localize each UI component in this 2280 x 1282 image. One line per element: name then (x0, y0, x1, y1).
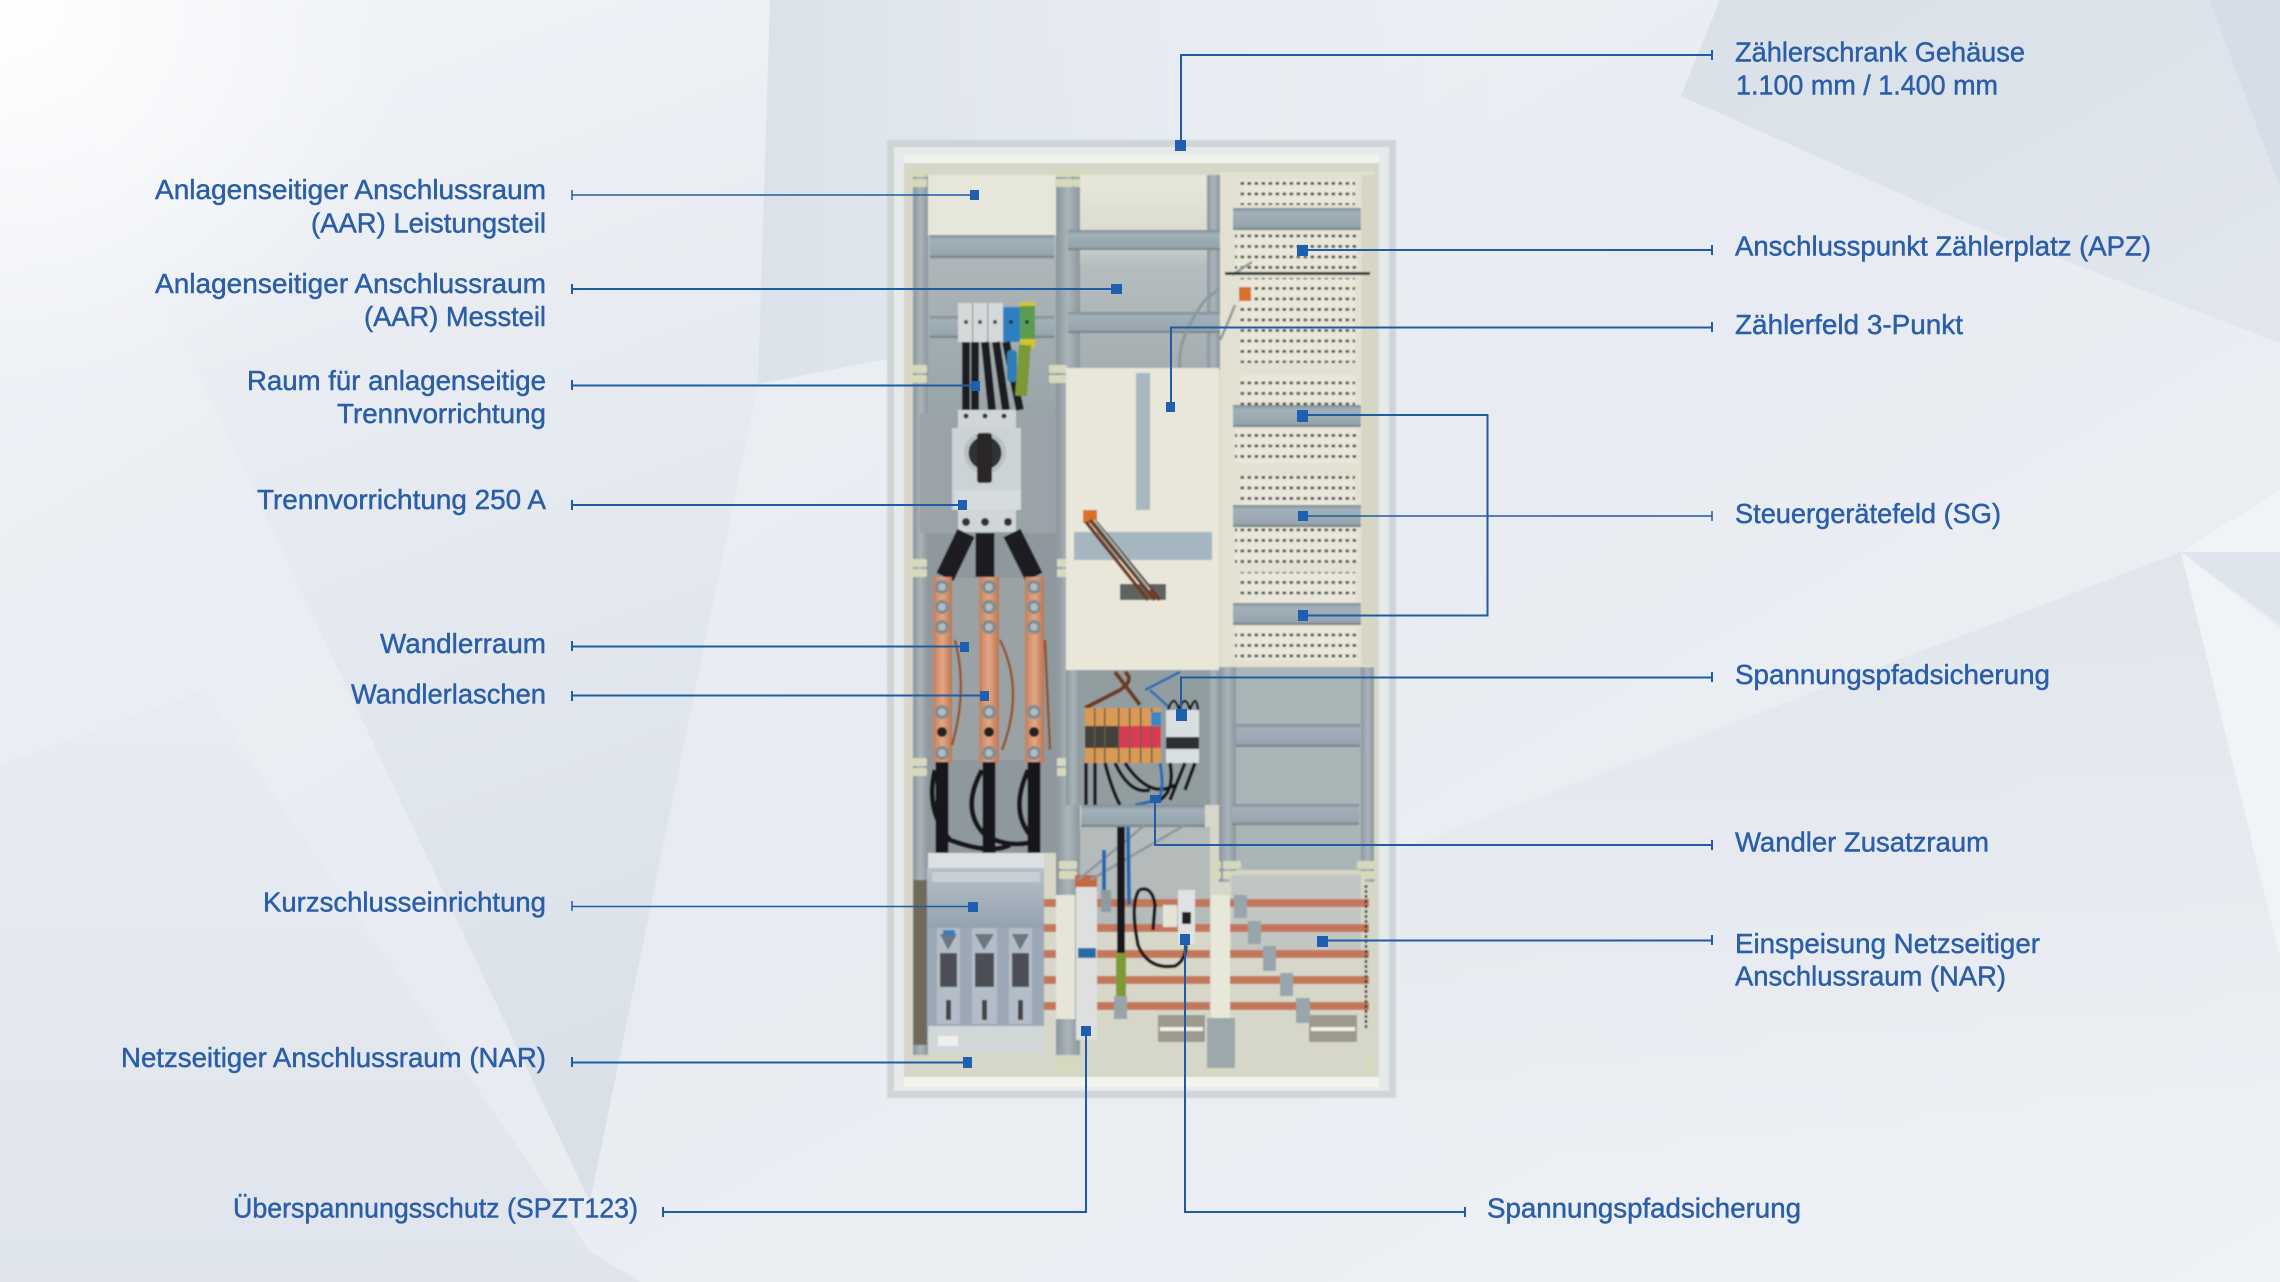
left column: AAR power section (909, 169, 1091, 1055)
callout: Trennvorrichtung 250 A: Trennvorrichtung 250 A (257, 484, 547, 515)
callout: Zählerfeld 3-Punkt (1166, 309, 1963, 412)
callout: Spannungspfadsicherung right: Spannungspfadsicherung (1735, 659, 2050, 690)
callout: Anlagenseitiger Anschlussraum (AAR) Messteil: (AAR) Messteil (364, 301, 546, 332)
callout: Wandlerlaschen (351, 678, 989, 710)
electrical meter cabinet (887, 140, 1396, 1098)
callout: Raum für anlagenseitige Trennvorrichtung: Raum für anlagenseitige (247, 365, 546, 396)
callout: Wandlerraum (380, 628, 969, 659)
callout: Überspannungsschutz (SPZT123): Überspannungsschutz (SPZT123) (233, 1192, 638, 1224)
distribution terminal blocks (958, 302, 1035, 410)
callout: Zählerschrank Gehäuse (1175, 36, 2025, 151)
callout: Raum für anlagenseitige Trennvorrichtung: Trennvorrichtung (337, 398, 546, 429)
right column: control device field perforated plates (1220, 172, 1374, 669)
callout: Anlagenseitiger Anschlussraum (AAR) Leistungsteil: Anlagenseitiger Anschlussraum (155, 174, 546, 205)
callout: Überspannungsschutz (SPZT123) (233, 1026, 1091, 1224)
callout: Kurzschlusseinrichtung (263, 886, 978, 918)
callout: Spannungspfadsicherung bottom (1180, 934, 1801, 1224)
callout: Einspeisung Netzseitiger Anschlussraum (NAR) (1317, 928, 2040, 992)
callout: Wandlerraum: Wandlerraum (380, 628, 546, 659)
callout: Wandler Zusatzraum (1150, 795, 1989, 858)
callout: Anlagenseitiger Anschlussraum (AAR) Messteil (155, 268, 1122, 332)
cabinet frame (887, 140, 1396, 1098)
callout: Einspeisung Netzseitiger Anschlussraum (NAR): Anschlussraum (NAR) (1735, 960, 2006, 992)
callout: Anlagenseitiger Anschlussraum (AAR) Messteil: Anlagenseitiger Anschlussraum (155, 268, 546, 299)
current transformer room with copper bars (927, 533, 1057, 853)
callout: Steuergerätefeld (SG) with bracket: Steuergerätefeld (SG) (1735, 498, 2001, 529)
callout: Zählerfeld 3-Punkt: Zählerfeld 3-Punkt (1735, 309, 1963, 340)
lower middle: grid connection with surge protection (1044, 825, 1369, 1072)
callout: Netzseitiger Anschlussraum (NAR) (121, 1042, 972, 1073)
callout: Wandlerlaschen: Wandlerlaschen (351, 678, 546, 710)
callout: Anlagenseitiger Anschlussraum (AAR) Leistungsteil: (AAR) Leistungsteil (311, 208, 546, 238)
callout: Kurzschlusseinrichtung: Kurzschlusseinrichtung (263, 886, 546, 918)
callout: Netzseitiger Anschlussraum (NAR): Netzseitiger Anschlussraum (NAR) (121, 1042, 546, 1073)
short-circuit device fuse block (913, 853, 1044, 1053)
callout: Steuergerätefeld (SG) with bracket (1297, 410, 2001, 621)
disconnect switch 250 A (920, 410, 1056, 533)
callout: Anschlusspunkt Zählerplatz (APZ): Anschlusspunkt Zählerplatz (APZ) (1735, 230, 2151, 262)
callout: Spannungspfadsicherung right (1176, 659, 2050, 721)
right column: empty compartment with rails (1057, 667, 1375, 1075)
callout: Wandler Zusatzraum: Wandler Zusatzraum (1735, 826, 1989, 858)
callout: Zählerschrank Gehäuse: 1.100 mm / 1.400 mm (1736, 70, 1998, 100)
callout: Anschlusspunkt Zählerplatz (APZ) (1297, 230, 2151, 262)
callout: Anlagenseitiger Anschlussraum (AAR) Leistungsteil (155, 174, 979, 238)
callout: Spannungspfadsicherung bottom: Spannungspfadsicherung (1487, 1192, 1801, 1224)
meter field panel (1066, 368, 1219, 670)
callout: Raum für anlagenseitige Trennvorrichtung (247, 365, 980, 429)
callout: Zählerschrank Gehäuse: Zählerschrank Gehäuse (1735, 36, 2025, 68)
callout: Trennvorrichtung 250 A (257, 484, 967, 515)
upper middle compartment AAR measuring (1068, 175, 1230, 370)
callout: Einspeisung Netzseitiger Anschlussraum (NAR): Einspeisung Netzseitiger (1735, 928, 2040, 959)
lower middle compartment terminals and fuses (1066, 670, 1220, 827)
